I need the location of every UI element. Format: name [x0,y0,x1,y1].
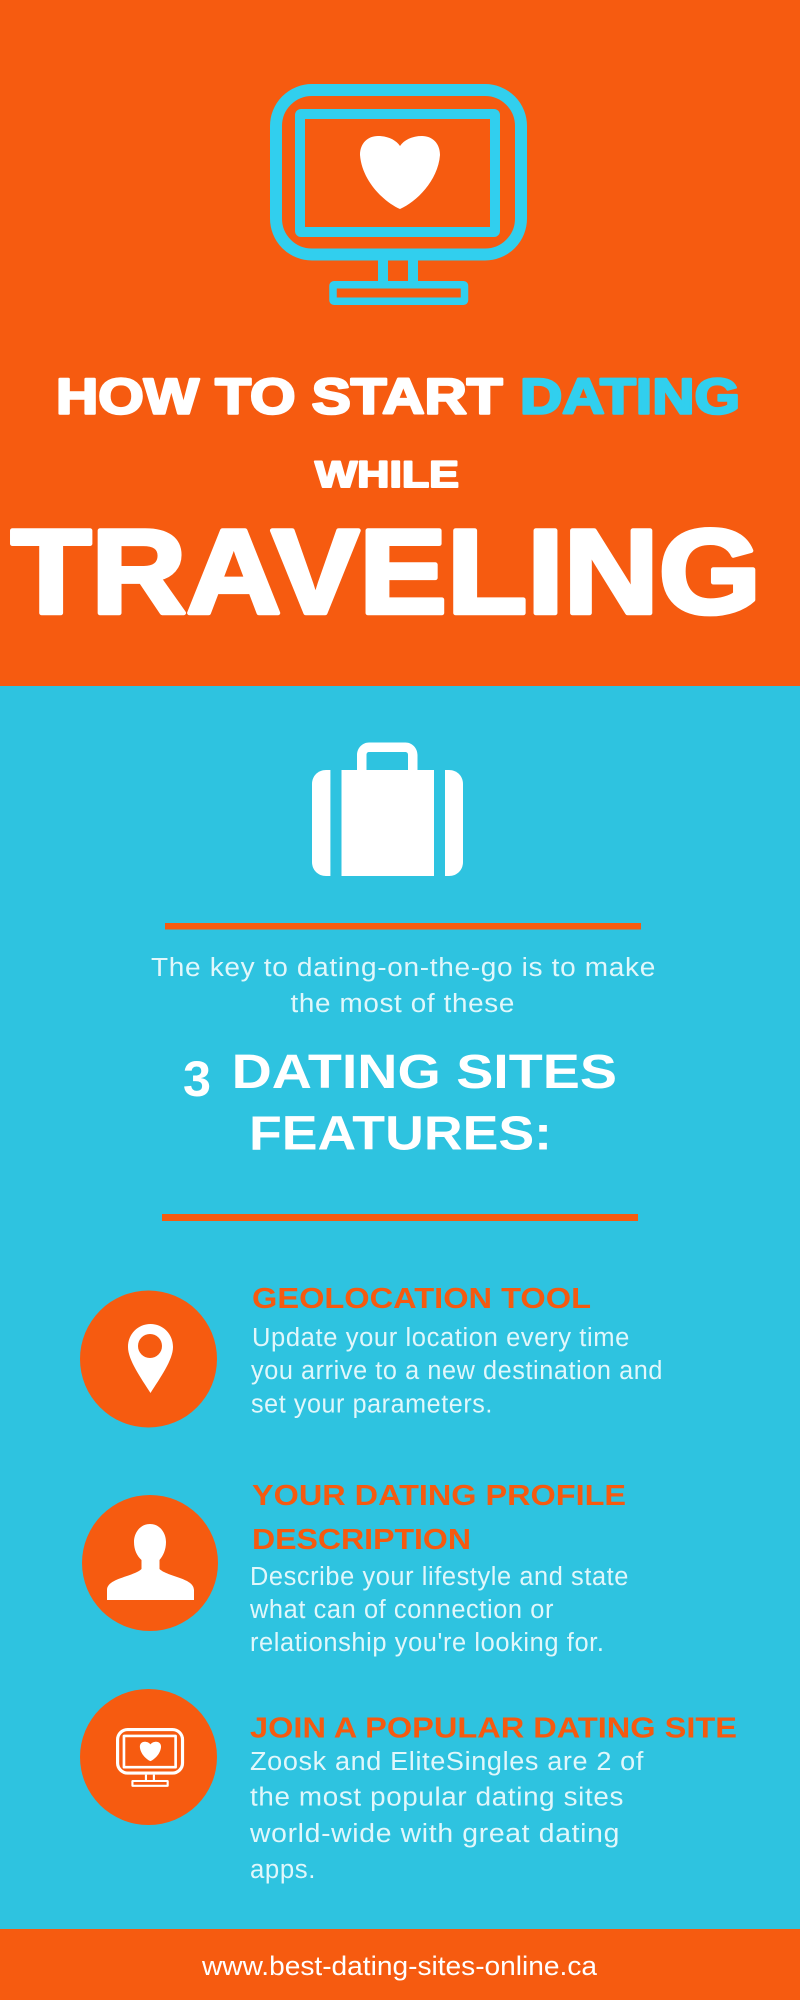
section heading: FEATURES: [249,1108,552,1160]
title: WHILE [315,454,459,495]
section heading: 3 [183,1051,211,1107]
panel: orange footer [0,1929,800,2000]
icon: suitcase [312,742,463,876]
feature: dating profile description [82,1480,629,1657]
panel: blue features section [0,686,800,1929]
heading: your dating profile description: YOUR DATING PROFILE [252,1480,626,1512]
heading: your dating profile description: DESCRIPTION [252,1524,471,1556]
feature: geolocation tool [80,1283,663,1428]
text: profile description: relationship you're looking for. [250,1629,604,1657]
intro text: the most of these [290,990,515,1018]
intro text [151,954,656,1018]
icon: location pin [80,1290,217,1428]
text: join description: apps. [250,1856,316,1884]
text: geolocation description [251,1324,663,1418]
text: profile description [249,1563,629,1657]
text: join description: the most popular dating sites [250,1784,624,1812]
heading: your dating profile description [252,1480,626,1556]
divider line [165,923,641,930]
icon: person [82,1495,218,1631]
heading: join a popular dating site: JOIN A POPULAR DATING SITE [250,1712,737,1744]
feature: join a popular dating site [80,1689,737,1884]
divider line [162,1214,638,1221]
text: geolocation description: you arrive to a new destination and [251,1357,663,1385]
intro text: The key to dating-on-the-go is to make [151,954,656,982]
text: profile description: Describe your lifestyle and state [250,1563,629,1591]
text: geolocation description: set your parameters. [251,1390,493,1418]
icon: monitor with heart [276,90,521,301]
footer url: www.best-dating-sites-online.ca [201,1951,598,1981]
title: HOW TO START [56,368,502,424]
text: join description [249,1748,644,1884]
text: geolocation description: Update your location every time [252,1324,630,1352]
panel: orange header [0,0,800,686]
title: DATING [520,368,740,424]
text: join description: world-wide with great dating [249,1820,620,1848]
heading: geolocation tool: GEOLOCATION TOOL [252,1283,591,1315]
section heading: DATING SITES [232,1046,617,1099]
section heading [183,1046,617,1160]
title [11,368,761,639]
text: join description: Zoosk and EliteSingles are 2 of [250,1748,644,1776]
icon: small monitor with heart [80,1689,217,1825]
title: TRAVELING [11,505,761,639]
text: profile description: what can of connection or [249,1596,554,1624]
